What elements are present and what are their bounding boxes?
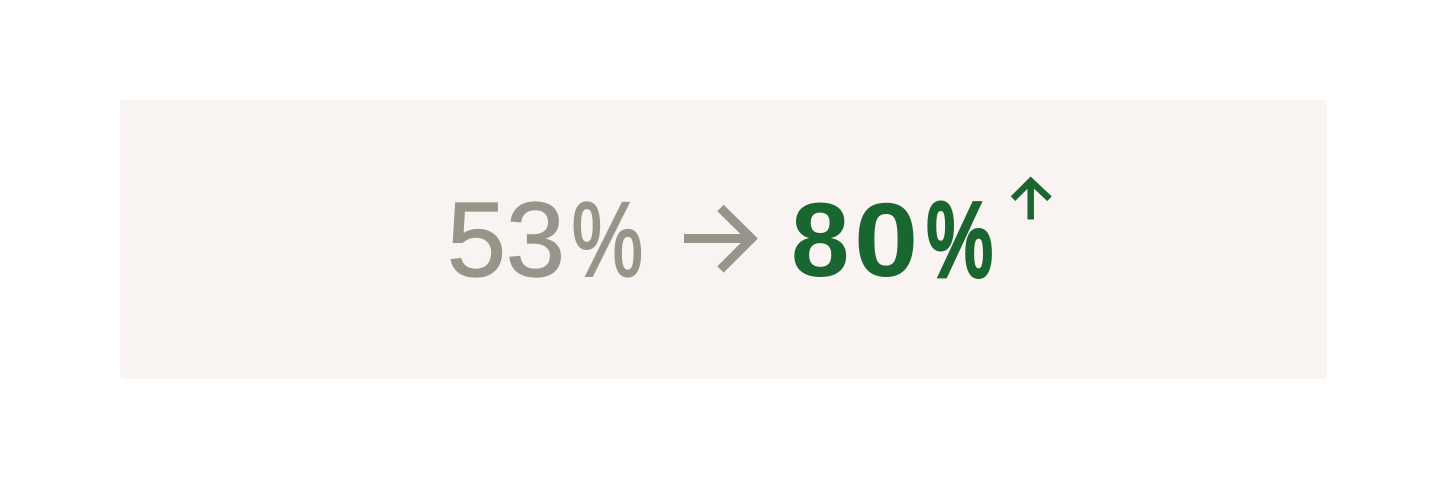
after value: 80%: %: [926, 183, 993, 299]
after value: 80%: 8: [791, 182, 849, 299]
before value: 53%: 5: [447, 181, 506, 299]
arrow: right: [684, 208, 752, 270]
before value: 53%: %: [572, 180, 643, 299]
panel: background card: [120, 100, 1327, 379]
after value: 80%: [791, 182, 993, 299]
before value: 53%: 3: [506, 181, 565, 299]
before value: 53%: [447, 180, 643, 299]
icon: up arrow: [1013, 180, 1050, 220]
after value: 80%: 0: [854, 182, 918, 299]
